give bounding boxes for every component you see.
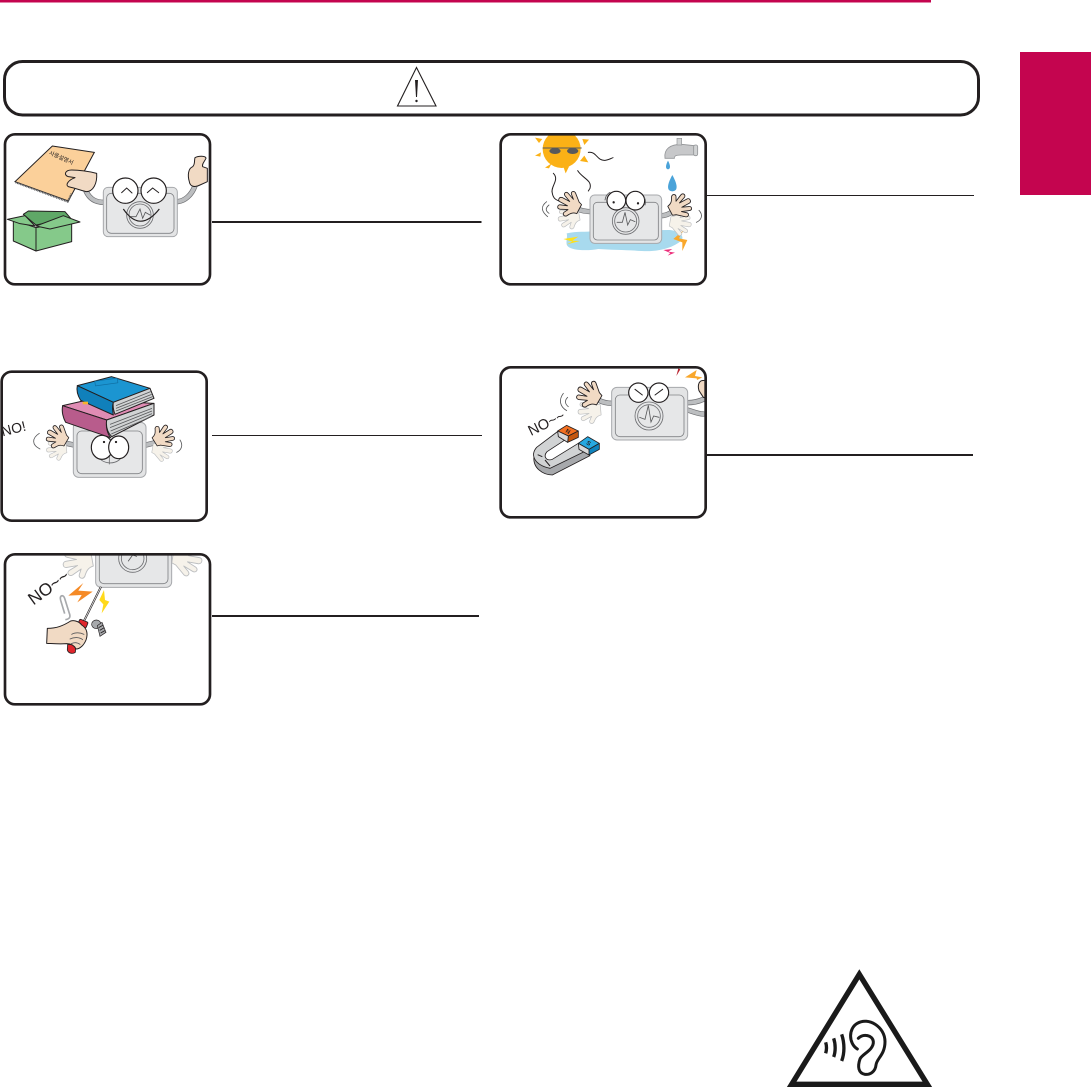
panel: read manual, keep box [5, 134, 210, 284]
panel: avoid sun and water [501, 130, 706, 284]
panel: do not poke with tools [4, 553, 212, 706]
icon: pink book [62, 400, 154, 438]
label: NO~~: NO~~ [24, 566, 73, 609]
panel artwork [535, 130, 701, 256]
icon: horseshoe magnet: N [564, 429, 571, 436]
icon: blue book [77, 377, 154, 415]
connector line 4 [706, 454, 973, 456]
heat wiggles [552, 152, 613, 201]
icon: manual [15, 146, 94, 202]
top rule [0, 0, 931, 2]
connector line 5 [212, 615, 479, 617]
icon: puddle [567, 230, 682, 251]
label: NO~~: NO~~ [526, 408, 568, 440]
icon: green box [7, 211, 80, 251]
panel: keep away from magnets [501, 367, 708, 517]
icon: sun with sunglasses [535, 136, 589, 174]
panel artwork [526, 368, 708, 475]
icon: warning triangle [398, 68, 436, 106]
icon: horseshoe magnet: S [585, 441, 591, 448]
character: happy monitor [65, 156, 207, 237]
icon: lightning [563, 230, 687, 256]
character: frowning monitor [560, 368, 708, 440]
icon: hearing warning triangle [792, 974, 927, 1084]
panel artwork [0, 377, 182, 477]
panel artwork [28, 556, 202, 654]
character: monitor bottom [62, 556, 202, 588]
label: NO!: NO! [0, 418, 28, 439]
connector line 3 [212, 435, 482, 436]
icon: faucet and drops [665, 138, 698, 191]
connector line 2 [706, 195, 974, 196]
icon: screw [92, 620, 106, 636]
icon: hand holding screwdriver [47, 587, 101, 653]
icon: manual: 사용설명서 [48, 149, 75, 167]
side tab [1020, 52, 1091, 195]
icon: horseshoe magnet [534, 425, 599, 475]
panel: do not stack objects [0, 372, 207, 521]
caution banner [4, 62, 978, 115]
icon: lightning [68, 583, 109, 613]
connector line 1 [212, 221, 482, 223]
icon: paperclip [60, 596, 70, 620]
character: startled monitor [542, 187, 701, 243]
character: squashed monitor [34, 420, 182, 477]
